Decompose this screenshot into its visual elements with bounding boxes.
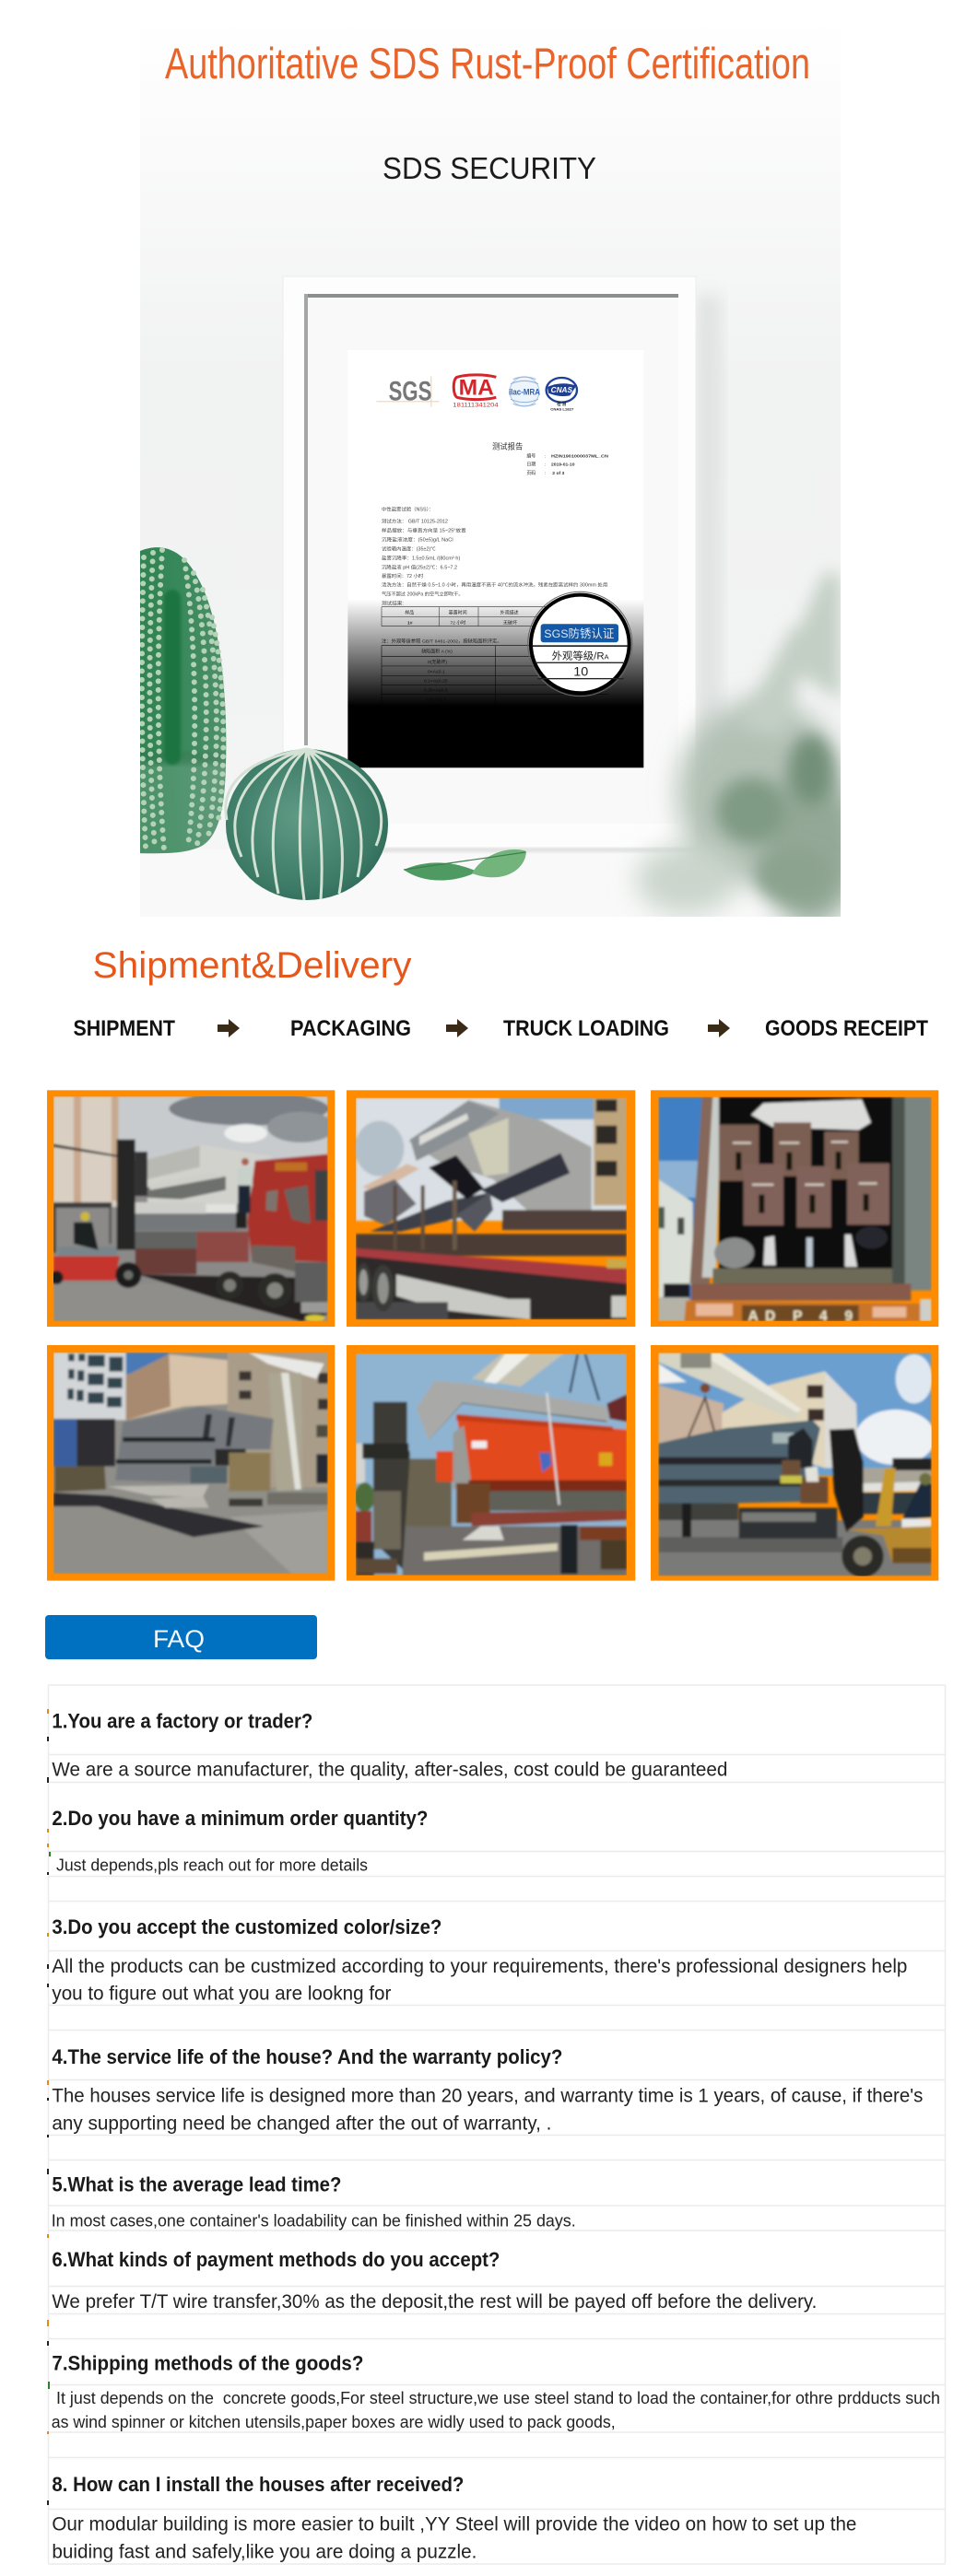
logo: CNAS: [547, 378, 577, 411]
arrow: [446, 1019, 468, 1037]
results table: 0<A≤0.1: [428, 669, 445, 674]
certificate frame: [283, 276, 696, 848]
magnified rating badge: SGS防锈认证: [544, 626, 614, 640]
blurred foreground plant: [636, 571, 862, 926]
test parameters text: 沉降盐液浓度：(50±5)g/L NaCl: [382, 536, 453, 544]
results table: 缺陷面积 A (%): [421, 649, 453, 655]
logo: ilac-MRA: ilac-MRA: [509, 387, 540, 396]
step: packaging: PACKAGING: [290, 1016, 411, 1041]
report heading: HZIN1901000037ML_CN: [551, 453, 608, 459]
arrow: [708, 1019, 730, 1037]
report heading: [492, 441, 608, 476]
test parameters text: 样品摆放：与垂直方向呈 15~25°放置: [382, 527, 466, 534]
test parameters text: 暴露时间：72 小时: [382, 572, 423, 580]
FAQ 3: [52, 1915, 907, 2005]
heading: Shipment and Delivery: Shipment&Delivery: [92, 945, 411, 986]
FAQ 1: [52, 1710, 727, 1780]
icon: dotted cactus: [140, 547, 227, 853]
FAQ 7: It just depends on the concrete goods,For steel structure,we use steel stand to load the container,for othre prdducts such: [56, 2388, 940, 2407]
report heading: 编号: [526, 452, 536, 459]
SGS test report document: [347, 350, 643, 767]
logo: CNAS: CNAS: [551, 385, 572, 394]
icon: small leaf: [404, 849, 526, 881]
photo: steel plates inside a container: [651, 1090, 938, 1327]
FAQ 8: [52, 2473, 856, 2563]
hero photo background: [140, 228, 841, 853]
logo: CMA: 181111341204: [453, 402, 499, 408]
process flow: [74, 1016, 928, 1041]
results table: 0(无破坏): [428, 659, 447, 665]
test parameters text: 中性盐雾试验（NSS）：: [382, 505, 434, 512]
magnified rating badge: [528, 591, 632, 697]
magnified rating badge: 10: [573, 663, 589, 678]
test parameters text: 气压不超过 200kPa 的空气立即吹干。: [382, 591, 464, 598]
FAQ 8: buiding fast and safely,like you are doing a puzzle.: [52, 2541, 477, 2563]
results table: 72 小时: [450, 620, 465, 626]
FAQ 7: 7.Shipping methods of the goods?: [52, 2351, 363, 2375]
FAQ 1: We are a source manufacturer, the quality, after-sales, cost could be guaranteed: [52, 1760, 727, 1780]
FAQ 8: 8. How can I install the houses after received?: [52, 2473, 464, 2496]
results table: 注：外观等级参照 GB/T 6461-2002，按缺陷面积评定。: [382, 638, 502, 645]
results table: [382, 607, 608, 705]
results table: 0.5<A≤1.0: [426, 697, 447, 703]
FAQ 5: In most cases,one container's loadability can be finished within 25 days.: [52, 2211, 576, 2230]
step: shipment: SHIPMENT: [74, 1016, 175, 1041]
test parameters text: 清洗方法：自然干燥 0.5~1.0 小时，再用温度不高于 40℃的流水冲洗，残素在距离试样约 300mm 处用: [382, 581, 607, 589]
FAQ 3: All the products can be custmized according to your requirements, there's professional designers help: [52, 1956, 907, 1977]
photo: orange module lifted by a crane: [347, 1345, 635, 1581]
FAQ 7: [52, 2351, 940, 2431]
FAQ 7: as wind spinner or kitchen utensils,paper boxes are widly used to pack goods,: [52, 2412, 616, 2431]
test parameters text: 测试方法： GB/T 10125-2012: [382, 518, 448, 525]
FAQ 2: 2.Do you have a minimum order quantity?: [52, 1807, 428, 1830]
FAQ 5: [52, 2172, 576, 2230]
title: Authoritative SDS Rust-Proof Certification: [165, 39, 810, 88]
step: goods receipt: GOODS RECEIPT: [765, 1016, 928, 1041]
photo: forklift loading a red truck: [47, 1090, 335, 1327]
results table: 外观描述: [500, 610, 519, 616]
report heading: 页码: [526, 470, 536, 476]
FAQ button: [45, 1615, 317, 1659]
test parameters text: 沉降盐液 pH 值(25±2)℃：6.5~7.2: [382, 563, 457, 570]
FAQ 4: any supporting need be changed after the out of warranty, .: [52, 2113, 551, 2134]
report heading: :: [545, 471, 546, 476]
photo: steel frames strapped on a flatbed: [347, 1090, 635, 1327]
report heading: 日期: [526, 463, 536, 468]
logo: CMA: [453, 375, 499, 408]
FAQ 3: you to figure out what you are lookng for: [52, 1983, 391, 2005]
test parameters text: 盐雾沉降率：1.5±0.5mL /(80cm²·h): [382, 554, 461, 561]
FAQ 6: [52, 2248, 817, 2313]
FAQ 6: 6.What kinds of payment methods do you accept?: [52, 2248, 500, 2271]
logo: CNAS: CNAS L1827: [550, 406, 574, 411]
magnified rating badge: 外观等级/RA: [552, 649, 609, 662]
logo: ilac-MRA: [509, 377, 540, 406]
FAQ 4: [52, 2045, 923, 2134]
icon: striped round cactus: [226, 749, 388, 900]
subtitle: SDS SECURITY: [383, 151, 596, 185]
report heading: 2019-01-10: [551, 463, 575, 468]
report heading: :: [545, 453, 546, 459]
photo: steel plates inside a container: AD P 4 9: [748, 1308, 853, 1324]
report heading: 2 of 3: [552, 471, 565, 476]
FAQ 2: [52, 1807, 428, 1874]
arrow: [218, 1019, 240, 1037]
logo: SGS: SGS: [389, 376, 431, 406]
results table: 无破坏: [503, 620, 517, 626]
test parameters text: [382, 505, 607, 606]
photo: forklift moving steel frames: [651, 1345, 938, 1581]
test parameters text: 测试结果:: [382, 599, 404, 606]
panel: FAQ table: [47, 1685, 946, 2564]
test parameters text: 试验箱内温度：(35±2)℃: [382, 544, 436, 552]
FAQ 4: 4.The service life of the house? And the warranty policy?: [52, 2045, 562, 2068]
panel: SDS certification hero: [129, 18, 862, 926]
FAQ 2: Just depends,pls reach out for more details: [56, 1856, 368, 1874]
logo: CNAS: 检 测: [557, 401, 567, 407]
results table: 0.1<A≤0.25: [424, 679, 448, 685]
report heading: 测试报告: [492, 441, 523, 451]
results table: 样品: [405, 610, 414, 616]
step: truck loading: TRUCK LOADING: [503, 1016, 669, 1041]
black fade overlay: [347, 599, 643, 707]
FAQ 1: 1.You are a factory or trader?: [52, 1710, 312, 1732]
logo: CMA: MA: [459, 376, 494, 401]
results table: 1#: [407, 621, 413, 626]
FAQ 5: 5.What is the average lead time?: [52, 2172, 341, 2196]
FAQ 4: The houses service life is designed more than 20 years, and warranty time is 1 years, of cause, if there's: [52, 2086, 923, 2106]
photo: steel frame next to container: [47, 1345, 335, 1581]
FAQ 3: 3.Do you accept the customized color/size?: [52, 1915, 441, 1938]
report heading: :: [545, 463, 546, 468]
results table: 0.25<A≤0.5: [424, 688, 448, 694]
FAQ button: FAQ: [153, 1625, 205, 1653]
FAQ 6: We prefer T/T wire transfer,30% as the deposit,the rest will be payed off before the delivery.: [52, 2291, 817, 2313]
FAQ 8: Our modular building is more easier to built ,YY Steel will provide the video on how to set up the: [52, 2513, 856, 2535]
results table: 暴露时间: [449, 610, 467, 616]
